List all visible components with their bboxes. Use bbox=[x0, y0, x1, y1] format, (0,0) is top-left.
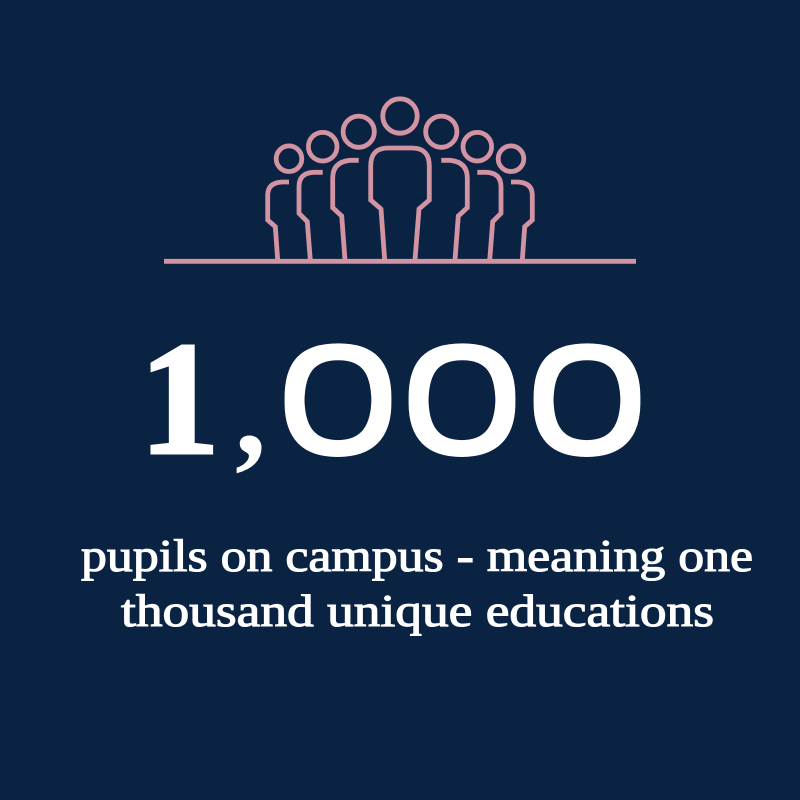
caption text bbox=[81, 530, 753, 636]
caption text: pupils on campus - meaning one bbox=[81, 530, 753, 581]
caption text: thousand unique educations bbox=[121, 585, 714, 636]
big number bbox=[139, 310, 649, 489]
big number: 0 bbox=[400, 316, 524, 485]
icon: left people bbox=[268, 116, 374, 260]
big number: 0 bbox=[525, 316, 649, 485]
icon: centre person bbox=[371, 99, 429, 260]
big number: 1 bbox=[139, 310, 220, 489]
icon: ground line bbox=[164, 259, 636, 264]
big number: 0 bbox=[276, 316, 400, 485]
icon: right people bbox=[426, 116, 532, 260]
big number: , bbox=[235, 344, 266, 482]
icon: group of seven people standing on a line bbox=[164, 99, 636, 261]
